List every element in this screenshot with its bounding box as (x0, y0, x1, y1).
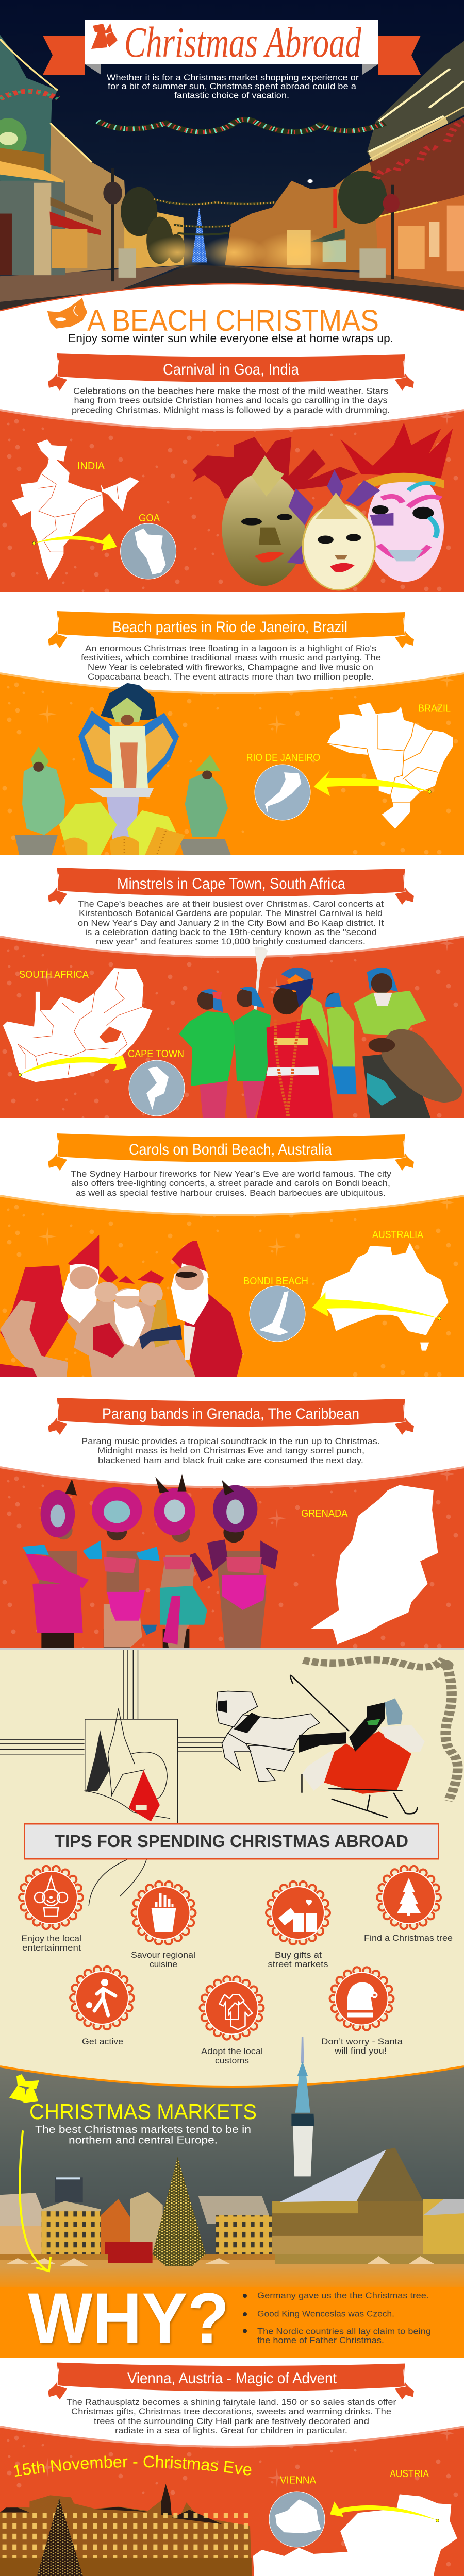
icon: cup (135, 1885, 192, 1941)
white arc below hero (0, 284, 464, 361)
text: markets intro (35, 2124, 251, 2146)
icon: gifts (270, 1885, 326, 1941)
label: Find a Christmas tree (364, 1933, 453, 1943)
intro text (107, 73, 359, 100)
label: Vienna: VIENNA (280, 2475, 317, 2486)
banner: Rio (48, 611, 414, 648)
tip: gifts (268, 1885, 328, 1969)
circle: Rio map (255, 765, 310, 820)
illustration: house and fence lines (0, 1650, 231, 1906)
text: Cape Town (78, 899, 384, 946)
illustration: horse and red sleigh (216, 1675, 425, 1818)
text: Bondi: The Sydney Harbour fireworks for New Year’s Eve are world famous. The city (71, 1169, 392, 1179)
icon: carnival mask (47, 298, 87, 329)
text: Rio: New Year is celebrated with fireworks, Champagne and live music on (88, 663, 373, 672)
banner: Carnival in Goa (48, 353, 414, 391)
text: Cape Town: on New Year's Day and January 2 in the City Bowl and Bo Kaap district. It (78, 918, 384, 928)
icon: tree (380, 1869, 437, 1926)
icon: clown (23, 1869, 79, 1926)
beige tips background with curved bottom (0, 1650, 464, 2087)
text: markets intro: The best Christmas markets tend to be in (35, 2124, 251, 2136)
text: Cape Town: is a celebration dating back to the 19th-century known as the "second (85, 927, 377, 937)
ornament: corner flourish (303, 1659, 458, 1801)
label: Enjoy the local (21, 1934, 81, 1943)
banner: Vienna: Vienna, Austria - Magic of Advent (127, 2370, 337, 2387)
text: Goa: hang from trees outside Christian homes and locals go carolling in the days (74, 396, 388, 405)
text: Vienna (66, 2397, 396, 2435)
tip: cuisine: cuisine (150, 1959, 177, 1969)
tip: customs: customs (215, 2056, 249, 2065)
text: Goa (72, 386, 390, 415)
sky and town photo: Christmas markets (0, 2061, 464, 2288)
panel: Cape Town (0, 936, 464, 1118)
banner: Grenada (48, 1398, 414, 1435)
subtitle: Enjoy some winter sun while everyone else at home wraps up. (68, 332, 393, 345)
banner: Bondi: Carols on Bondi Beach, Australia (129, 1141, 332, 1158)
map: Grenada (311, 1485, 438, 1645)
text: Rio: festivities, which combine traditional mass with music and partying. The (81, 653, 381, 663)
tip: cuisine (131, 1885, 195, 1969)
text: Vienna: The Rathausplatz becomes a shining fairytale land. 150 or so sales stands offer (66, 2397, 396, 2407)
label: Adopt the local (201, 2046, 263, 2056)
banner: Cape Town (48, 868, 414, 905)
label: Don’t worry - Santa (321, 2037, 403, 2046)
photo: Vienna Rathaus market (0, 2484, 252, 2576)
map: South Africa (3, 968, 153, 1082)
label: Buy gifts at (275, 1950, 322, 1960)
banner: Grenada: Parang bands in Grenada, The Caribbean (102, 1405, 359, 1422)
tip: active (74, 1970, 130, 2046)
intro text: fantastic choice of vacation. (174, 91, 289, 100)
label: Australia: AUSTRALIA (372, 1229, 424, 1241)
text: Cape Town: Kirstenbosch Botanical Gardens are popular. The Minstrel Carnival is held (79, 908, 383, 918)
text: Cape Town: The Cape's beaches are at their busiest over Christmas. Carol concerts at (78, 899, 384, 909)
circle: Goa map (121, 523, 176, 579)
icon: bells (91, 23, 118, 49)
date: Vienna: 15th November - Christmas Eve (13, 2455, 252, 2477)
panel: Grenada (0, 1466, 464, 1650)
icon: yellow bells (9, 2074, 39, 2103)
text: Grenada: blackened ham and black fruit cake are consumed the next day. (98, 1455, 363, 1465)
text: Grenada: Parang music provides a tropical soundtrack in the run up to Christmas. (81, 1436, 380, 1446)
label: Cape Town: CAPE TOWN (128, 1048, 184, 1060)
label: Brazil: BRAZIL (418, 703, 451, 714)
panel: Why (0, 2278, 464, 2359)
text: Bondi (71, 1169, 392, 1198)
tip: entertainment (21, 1869, 81, 1953)
arrow: yellow down to Why (20, 2131, 51, 2271)
banner: Bondi (48, 1133, 414, 1171)
map: Brazil (313, 703, 453, 829)
text: Bondi: as well as special festive harbour cruises. Beach barbecues are ubiquitous. (76, 1188, 386, 1198)
tips heading box (25, 1824, 438, 1859)
label: Rio de Janeiro: RIO DE JANEIRO (246, 752, 320, 764)
panel: Bondi (0, 1195, 464, 1377)
photo: minstrels (179, 947, 462, 1118)
bullet list: The Nordic countries all lay claim to being (257, 2327, 431, 2336)
map: Austria (253, 2494, 457, 2576)
circle: Bondi map (250, 1286, 305, 1342)
tip: customs (201, 1979, 263, 2065)
icon: Santa hat (333, 1970, 390, 2027)
banner: Vienna (48, 2363, 414, 2400)
tips heading box: TIPS FOR SPENDING CHRISTMAS ABROAD (55, 1832, 408, 1851)
heading: Christmas markets: CHRISTMAS MARKETS (29, 2099, 257, 2124)
heading: a beach christmas: A BEACH CHRISTMAS (87, 304, 379, 337)
label: Savour regional (131, 1950, 195, 1960)
photo: Santas on the beach (0, 1235, 243, 1377)
label: Bondi Beach: BONDI BEACH (243, 1276, 308, 1287)
label: South Africa: SOUTH AFRICA (19, 969, 89, 980)
banner: Rio: Beach parties in Rio de Janeiro, Brazil (112, 619, 347, 636)
bullet list: Germany gave us the the Christmas tree. (257, 2291, 429, 2300)
map: India (12, 439, 139, 580)
tip: tree (364, 1869, 453, 1943)
text: Vienna: radiate in a sea of lights. Great for children in particular. (115, 2426, 347, 2435)
text: Goa: Celebrations on the beaches here make the most of the mild weather. Stars (73, 386, 388, 396)
intro text: for a bit of summer sun, Christmas spent abroad could be a (108, 81, 357, 91)
text: Vienna: Christmas gifts, Christmas tree decorations, sweets and warming drinks. The (71, 2406, 391, 2416)
text: Rio: Copacabana beach. The event attracts more than two million people. (88, 672, 374, 682)
text: Grenada: Midnight mass is held on Christmas Eve and tangy sorrel punch, (97, 1446, 364, 1455)
text: Rio: An enormous Christmas tree floating in a lagoon is a highlight of Rio's (85, 643, 376, 653)
panel: Goa (0, 409, 464, 592)
white title panel (85, 20, 378, 64)
photo: carnival dancers (22, 1474, 278, 1649)
label: India: INDIA (77, 461, 105, 472)
tip: entertainment: entertainment (22, 1943, 81, 1953)
intro text: Whether it is for a Christmas market shopping experience or (107, 73, 359, 82)
panel: Vienna (0, 2426, 464, 2576)
text: Cape Town: new year" and features some 10,000 brightly costumed dancers. (96, 937, 366, 946)
bullet list (243, 2291, 431, 2345)
text: Grenada (81, 1436, 380, 1465)
photo: samba float (15, 683, 231, 855)
icon: footballer (74, 1970, 130, 2026)
panel: Rio (0, 672, 464, 855)
banner: Carnival in Goa: Carnival in Goa, India (163, 361, 299, 378)
ribbon tails (43, 36, 421, 75)
circle: Cape Town map (129, 1060, 185, 1116)
bullet list: Good King Wenceslas was Czech. (257, 2309, 394, 2318)
label: Get active (82, 2037, 123, 2046)
hero photo: decorated main street at night (0, 0, 464, 322)
photo: town hall tower (291, 2037, 314, 2176)
text: Goa: preceding Christmas. Midnight mass is followed by a parade with drumming. (72, 405, 390, 415)
banner: Cape Town: Minstrels in Cape Town, South Africa (117, 875, 345, 892)
title text: Christmas Abroad (124, 19, 362, 66)
text: Vienna: trees of the surrounding City Hall park are festively decorated and (94, 2416, 369, 2426)
bullet list: the home of Father Christmas. (257, 2335, 384, 2345)
big word: why: WHY? (28, 2278, 229, 2359)
label: Goa: GOA (139, 513, 160, 524)
icon: shirts (203, 1979, 260, 2036)
photo: carnival masks (192, 422, 453, 590)
map: Australia (312, 1243, 449, 1351)
tip: Santa: will find you! (334, 2046, 387, 2056)
text: Bondi: also offers tree-lighting concerts, a street parade and carols on Bondi beach, (71, 1178, 390, 1188)
title ribbon (43, 19, 421, 75)
label: Austria: AUSTRIA (390, 2468, 429, 2480)
ribbon folds (85, 64, 378, 75)
text: Rio (81, 643, 381, 682)
tip: Santa (321, 1970, 403, 2056)
circle: Vienna map (269, 2492, 325, 2547)
label: Grenada: GRENADA (301, 1508, 348, 1519)
tip: gifts: street markets (268, 1959, 328, 1969)
text: markets intro: northern and central Europe. (69, 2135, 218, 2146)
